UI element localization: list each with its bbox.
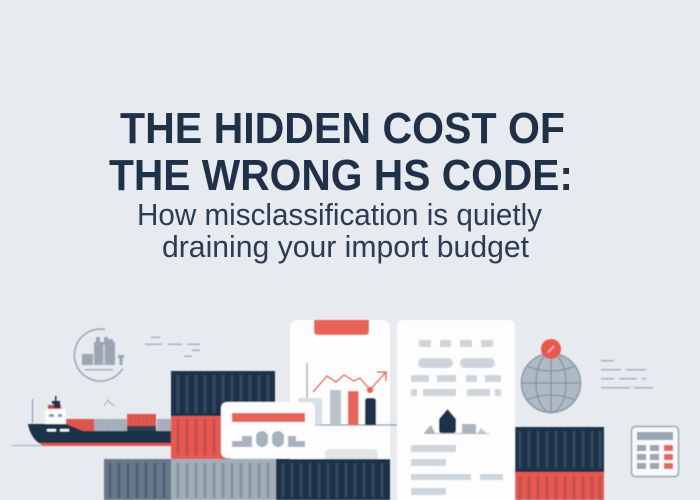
illustration	[12, 320, 678, 500]
panel: document	[397, 320, 515, 500]
icon: calculator	[632, 426, 678, 476]
decorative dashes right	[601, 360, 653, 388]
container: right navy	[515, 427, 604, 472]
grey tab	[325, 449, 378, 459]
container: red	[171, 416, 231, 459]
panel: chart card	[290, 320, 398, 465]
trend line arrow	[313, 372, 386, 392]
ship hull	[28, 424, 172, 446]
ship cargo	[66, 414, 171, 431]
label red bar	[232, 413, 305, 422]
document text lines	[411, 445, 503, 495]
bar chart	[298, 390, 376, 425]
icon: globe with pin	[522, 339, 580, 412]
ship mast	[32, 399, 33, 423]
container: right red	[515, 472, 604, 500]
ship bridge	[45, 396, 66, 424]
chart axes	[307, 363, 398, 425]
document table placeholders	[411, 340, 501, 396]
subtitle: draining your import budget	[162, 229, 529, 264]
title: THE WRONG HS CODE:	[109, 152, 573, 200]
icon: bird	[104, 400, 115, 406]
panel: small label card	[221, 402, 315, 458]
container: slate bottom	[104, 459, 171, 500]
label icons	[232, 431, 305, 447]
icon: warehouse in circle	[74, 329, 124, 381]
horizon line	[12, 445, 44, 446]
title	[109, 105, 573, 200]
container ship	[28, 396, 172, 446]
subtitle: How misclassification is quietly	[137, 197, 542, 232]
container: navy top	[171, 371, 275, 416]
title: THE HIDDEN COST OF	[120, 105, 565, 153]
document icon: product	[424, 409, 489, 434]
container: navy bottom	[276, 459, 390, 500]
decorative dashes left	[145, 336, 200, 357]
chart tab	[314, 320, 369, 335]
container: grey bottom	[171, 459, 276, 500]
subtitle	[137, 197, 542, 264]
